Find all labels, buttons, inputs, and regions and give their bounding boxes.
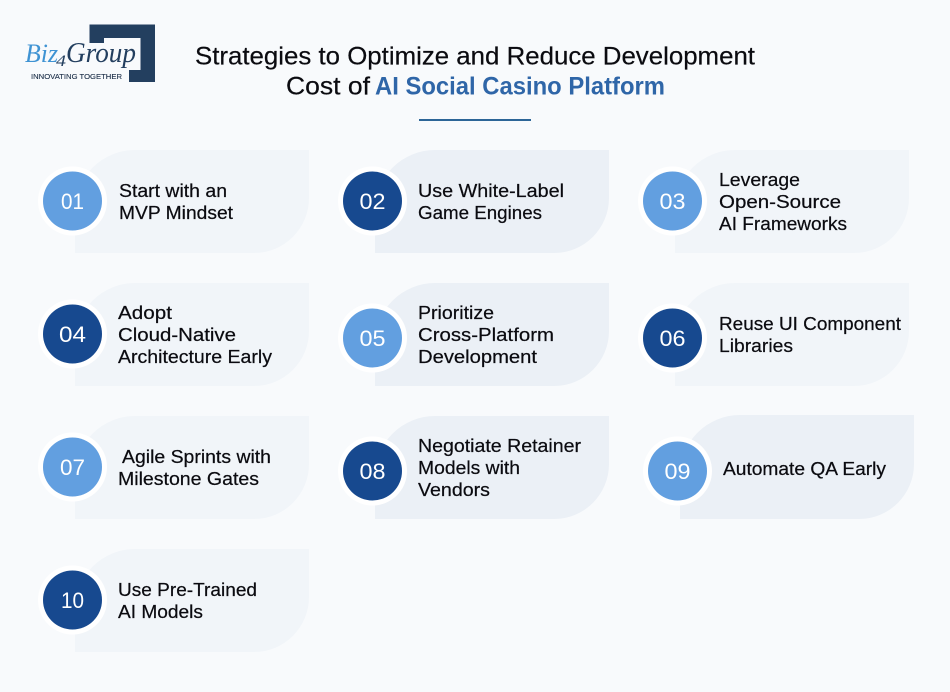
title underline — [419, 119, 531, 121]
logo: Group — [66, 38, 136, 69]
text 07: Milestone Gates — [118, 468, 259, 489]
text 04: Cloud-Native — [118, 324, 236, 345]
text 04: Adopt — [118, 302, 172, 323]
number 04 — [38, 300, 107, 368]
number 02 — [338, 166, 407, 236]
logo: Biz — [25, 39, 58, 68]
text 01: Start with an — [119, 180, 227, 201]
card 05 — [338, 283, 609, 386]
number 07: 07 — [60, 455, 85, 480]
text 02: Game Engines — [418, 202, 542, 223]
number 07 — [38, 432, 107, 502]
text 10: AI Models — [118, 601, 203, 622]
number 03 — [638, 166, 707, 236]
card 02 — [338, 150, 609, 253]
title: AI Social Casino Platform — [375, 72, 665, 100]
text 08 — [418, 435, 581, 500]
number 01: 01 — [61, 189, 84, 214]
text 09: Automate QA Early — [723, 458, 887, 479]
card 09 — [643, 415, 914, 519]
number 10 — [38, 566, 107, 634]
text 07 — [118, 446, 271, 489]
number 03: 03 — [660, 189, 686, 214]
card 08 — [338, 416, 609, 519]
text 10 — [118, 579, 257, 622]
text 06: Reuse UI Component — [719, 313, 901, 334]
number 05 — [338, 304, 407, 372]
text 10: Use Pre-Trained — [118, 579, 257, 600]
text 08: Vendors — [418, 479, 490, 500]
text 03: AI Frameworks — [719, 213, 847, 234]
number 09 — [643, 436, 712, 506]
text 06: Libraries — [719, 335, 793, 356]
title: Strategies to Optimize and Reduce Development — [195, 42, 755, 70]
logo: 4 — [56, 53, 66, 70]
number 06: 06 — [660, 326, 686, 351]
logo — [25, 24, 155, 82]
text 01: MVP Mindset — [119, 202, 233, 223]
text 06 — [719, 313, 901, 356]
number 04: 04 — [59, 322, 86, 347]
text 05 — [418, 302, 554, 367]
number 08: 08 — [360, 459, 386, 484]
text 03: Leverage — [719, 169, 800, 190]
text 05: Prioritize — [418, 302, 494, 323]
card 03 — [638, 150, 909, 253]
text 05: Cross-Platform — [418, 324, 554, 345]
text 03: Open-Source — [719, 191, 841, 212]
text 08: Negotiate Retainer — [418, 435, 581, 456]
title: Cost of — [286, 72, 370, 100]
number 09: 09 — [664, 459, 690, 484]
card 01 — [38, 150, 309, 253]
text 07: Agile Sprints with — [122, 446, 271, 467]
text 05: Development — [418, 346, 537, 367]
text 04: Architecture Early — [118, 346, 273, 367]
text 02: Use White-Label — [418, 180, 564, 201]
text 02 — [418, 180, 564, 223]
number 02: 02 — [360, 189, 386, 214]
text 04 — [118, 302, 273, 367]
number 10: 10 — [61, 588, 84, 613]
number 05: 05 — [360, 326, 386, 351]
card 10 — [38, 549, 309, 652]
number 08 — [338, 436, 407, 506]
text 08: Models with — [418, 457, 520, 478]
card 06 — [638, 283, 909, 386]
number 06 — [638, 304, 707, 372]
card 04 — [38, 283, 309, 386]
text 01 — [119, 180, 233, 223]
logo: INNOVATING TOGETHER — [31, 72, 123, 81]
title — [195, 42, 755, 100]
number 01 — [38, 166, 107, 236]
text 03 — [719, 169, 847, 234]
card 07 — [38, 416, 309, 519]
